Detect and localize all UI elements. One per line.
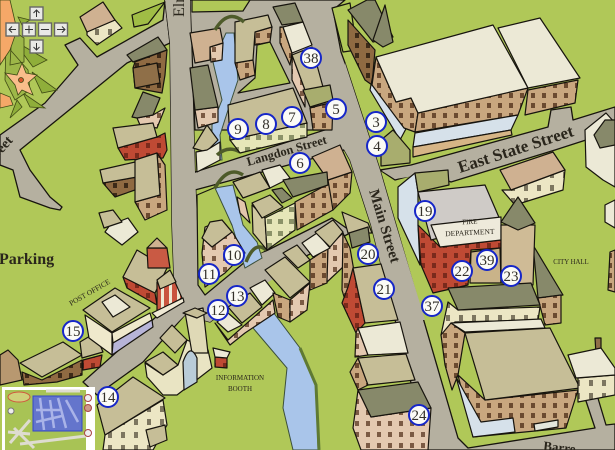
numbered location markers: 13 — [230, 289, 244, 305]
numbered location markers: 15 — [66, 324, 80, 340]
street and place labels: BOOTH — [228, 385, 252, 393]
numbered location markers — [63, 48, 521, 425]
street and place labels: FIRE — [462, 218, 478, 226]
street and place labels: Parking — [0, 251, 54, 268]
church tower and mall building — [348, 0, 580, 166]
buildings at river bend — [202, 220, 275, 345]
street and place labels: East State Street — [455, 121, 576, 177]
numbered location markers: 39 — [480, 253, 494, 269]
fire department and city hall — [398, 170, 563, 325]
post office and civic buildings — [0, 238, 184, 385]
numbered location markers: 12 — [210, 303, 226, 319]
numbered location markers: 8 — [262, 117, 270, 133]
street and place labels: DEPARTMENT — [445, 227, 495, 238]
numbered location markers: 24 — [412, 408, 427, 424]
street and place labels: CITY HALL — [553, 259, 589, 266]
south of Langdon block — [233, 145, 352, 250]
Main Street east block — [441, 283, 615, 437]
numbered location markers: 23 — [504, 269, 518, 285]
lawns — [192, 0, 357, 295]
building at 14 — [97, 377, 167, 450]
top left lawn and house — [80, 2, 165, 45]
numbered location markers: 38 — [304, 51, 318, 67]
numbered location markers: 4 — [373, 139, 381, 155]
numbered location markers: 5 — [332, 102, 340, 118]
numbered location markers: 20 — [360, 247, 376, 263]
numbered location markers: 11 — [202, 267, 216, 283]
river bank — [300, 348, 319, 450]
overview inset map — [2, 387, 95, 450]
numbered location markers: 37 — [424, 299, 440, 315]
numbered location markers: 19 — [418, 204, 432, 220]
row along northeast road — [265, 212, 372, 322]
numbered location markers: 9 — [234, 122, 242, 138]
numbered location markers: 21 — [376, 282, 392, 298]
west block buildings — [99, 37, 167, 245]
street and place labels: Main Street — [365, 187, 403, 265]
west side of Main Street buildings — [342, 227, 431, 450]
numbered location markers: 10 — [226, 248, 242, 264]
Langdon row and north column buildings — [228, 3, 333, 153]
green stone bridges — [215, 17, 266, 262]
street and place labels: POST OFFICE — [68, 277, 112, 308]
numbered location markers: 22 — [454, 264, 470, 280]
East State Street buildings — [500, 113, 615, 292]
Elm Street east side buildings — [190, 15, 272, 172]
flower illustration — [0, 0, 57, 118]
river — [212, 33, 318, 450]
church and information booth — [145, 308, 230, 395]
street and place labels: Langdon Street — [245, 132, 329, 169]
navigation control — [6, 7, 68, 53]
street and place labels: INFORMATION — [216, 374, 264, 382]
numbered location markers: 7 — [288, 110, 296, 126]
numbered location markers: 14 — [100, 390, 116, 406]
numbered location markers: 6 — [296, 156, 304, 172]
numbered location markers: 3 — [372, 115, 380, 131]
